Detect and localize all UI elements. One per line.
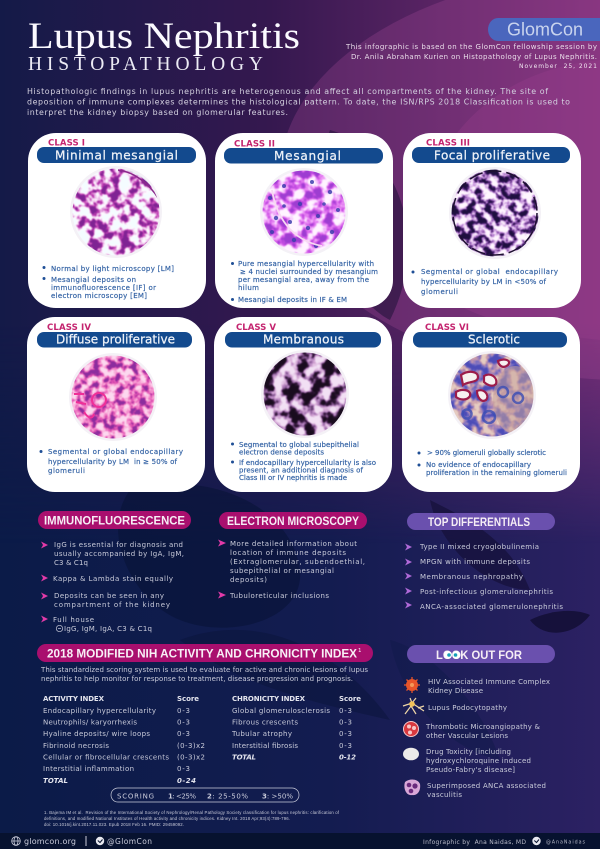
bullets: glomeruli [421, 288, 458, 296]
text block: ANCA-associated glomerulonephritis [420, 603, 563, 611]
class title pill: Minimal mesangial [55, 148, 178, 162]
arrow [405, 588, 412, 594]
bullets: hypercellularity by LM in ≥ 50% of [48, 458, 178, 466]
arrow [218, 540, 226, 546]
bullets: Segmental to global subepithelial [239, 441, 359, 449]
micrograph [448, 351, 537, 439]
scoring legend: 3: >50% [262, 792, 293, 800]
arrow [405, 602, 412, 608]
class label: CLASS IV [47, 323, 91, 333]
session credit: Dr. Anila Abraham Kurien on Histopathology of Lupus Nephritis. [351, 53, 597, 61]
session credit [345, 43, 597, 70]
class label: CLASS III [426, 138, 470, 148]
text block [54, 592, 170, 609]
bullets: per mesangial area, away from the [238, 276, 369, 284]
handle: @GlomCon [107, 837, 152, 846]
text block: deposits) [230, 576, 267, 584]
class label: CLASS VI [425, 323, 469, 333]
micrograph [260, 168, 348, 256]
intro text: Histopathologic findings in lupus nephritis are heterogenous and affect all compartments of the kidney. The site of [27, 87, 548, 96]
panel: class VI [402, 317, 580, 492]
arrow [405, 558, 412, 566]
author handle: @AnaNaidas [546, 840, 586, 846]
arrow [405, 572, 412, 580]
heading: LOOK OUT FOR [436, 650, 523, 662]
heading [219, 512, 367, 529]
heading [38, 511, 191, 529]
text block: HIV Associated Immune Complex [428, 678, 550, 686]
panel: top differentials [405, 513, 563, 611]
heading: ELECTRON MICROSCOPY [227, 516, 359, 528]
micrograph [449, 167, 541, 259]
micrograph [261, 350, 349, 438]
bullets: proliferation in the remaining glomeruli [426, 469, 567, 477]
text block [426, 748, 531, 774]
bullets: hilum [238, 284, 259, 292]
bullets: Segmental or global endocapillary [421, 268, 558, 276]
icon: neutrophil [404, 780, 420, 795]
footnote: definitions, and modified National Institutes of Health activity and chronicity indices. Kidney Int. 2018 Apr;93(4):789-796. [44, 816, 290, 821]
text block: Deposits can be seen in any [54, 592, 164, 600]
icon: twitter [532, 837, 541, 845]
activity index table: 0-3 [177, 765, 190, 773]
class label: CLASS V [236, 323, 276, 333]
class title pill [224, 148, 383, 164]
text block [425, 723, 541, 740]
GlomCon badge [488, 18, 600, 41]
session credit: November 25, 2021 [519, 63, 597, 70]
class title pill: Membranous [263, 332, 344, 346]
activity index table: TOTAL [43, 777, 68, 785]
arrow [41, 616, 48, 622]
intro text: interpret the kidney biopsy based on glomerular features. [27, 108, 288, 117]
bullets [40, 448, 183, 475]
class title pill [37, 332, 192, 348]
chronicity index table: Tubular atrophy [231, 730, 292, 738]
intro text: deposition of immune complexes determines the histological pattern. To date, the ISN/RPS 2018 Classification is used to [27, 98, 570, 106]
bullets: electron microscopy [EM] [51, 292, 147, 300]
chronicity index table: 0-3 [339, 730, 352, 738]
activity index table: Score [177, 695, 199, 703]
bullets: present, an additional diagnosis of [239, 466, 364, 474]
panel: electron microscopy [218, 512, 367, 600]
heading [407, 513, 555, 530]
bullets: No evidence of endocapillary [426, 461, 531, 469]
text block: compartment of the kidney [54, 601, 170, 609]
bullets: Mesangial deposits in IF & EM [238, 296, 347, 304]
bullets: If endocapillary hypercellularity is also [239, 459, 376, 467]
text block: Tubuloreticular inclusions [229, 592, 329, 600]
activity index table: 0-3 [177, 707, 190, 715]
chronicity index table: Global glomerulosclerosis [232, 707, 330, 715]
icon: pill [403, 748, 419, 760]
activity index table: 0-3 [177, 718, 190, 726]
class title pill: Sclerotic [468, 332, 520, 346]
heading: 1 [358, 648, 362, 654]
text block [53, 616, 152, 633]
chronicity index table: Interstitial fibrosis [232, 742, 298, 750]
heading: IMMUNOFLUORESCENCE [44, 516, 185, 528]
arrow [218, 592, 226, 598]
text block: Thrombotic Microangiopathy & [425, 723, 541, 731]
icon: twitter [96, 837, 104, 845]
description [40, 666, 368, 683]
website: glomcon.org [24, 837, 76, 846]
class title pill: Focal proliferative [434, 148, 550, 162]
bullets: Normal by light microscopy [LM] [51, 265, 174, 273]
micrograph [69, 353, 157, 441]
chronicity index table: TOTAL [232, 754, 256, 762]
activity index table: (0-3)x2 [177, 742, 205, 750]
text block: Superimposed ANCA associated [427, 782, 546, 790]
activity index table: (0-3)x2 [177, 754, 205, 762]
arrow [405, 544, 412, 550]
text block: (Extraglomerular, subendoethial, [230, 558, 365, 566]
class title pill: Diffuse proliferative [56, 332, 175, 346]
title: Lupus Nephritis [28, 16, 300, 57]
bullets: electron dense deposits [239, 448, 324, 456]
class title pill [413, 332, 567, 348]
bullets [412, 268, 558, 296]
text block: IgG is essential for diagnosis and [54, 541, 183, 549]
footnote [44, 810, 340, 827]
bullets: immunofluorescence [IF] or [51, 284, 156, 292]
text block: subepithelial or mesangial [230, 567, 334, 575]
text block: IgG, IgM, IgA, C3 & C1q [64, 625, 152, 633]
panel: class IV [27, 317, 205, 492]
text block: location of immune deposits [230, 549, 346, 557]
text block: Type II mixed cryoglobulinemia [419, 543, 539, 551]
text block [54, 541, 184, 567]
chronicity index table: 0-3 [339, 742, 352, 750]
arrow [41, 592, 48, 600]
class label: CLASS II [234, 140, 275, 150]
chronicity index table: 0-3 [339, 707, 352, 715]
panel: immunofluorescence [38, 511, 191, 633]
activity index table: Interstitial inflammation [43, 765, 134, 773]
activity index table: Endocapillary hypercellularity [43, 707, 156, 715]
title [28, 16, 300, 75]
bullets [231, 260, 378, 304]
text block: other Vascular Lesions [426, 732, 508, 740]
chronicity index table: 0-3 [339, 718, 352, 726]
text block [230, 540, 365, 584]
class title pill [412, 147, 570, 163]
intro text [27, 87, 570, 117]
class title pill: Mesangial [274, 149, 341, 163]
chronicity index table: 0-12 [339, 754, 356, 762]
text block: MPGN with immune deposits [420, 558, 530, 566]
bullets: > 90% glomeruli globally sclerotic [427, 449, 546, 457]
footer [0, 833, 600, 849]
description: This standardized scoring system is used to evaluate for active and chronic lesions of lupus [40, 666, 368, 674]
micrograph [70, 166, 162, 258]
activity index table [43, 695, 205, 785]
activity index table: ACTIVITY INDEX [43, 695, 105, 703]
arrow [41, 542, 48, 548]
text block: C3 & C1q [54, 559, 88, 567]
footnote: doi: 10.1016/j.kint.2017.11.023. Epub 2018 Feb 16. PMID: 29459092. [44, 822, 184, 827]
description: nephritis to help monitor for response to treatment, disease progression and prognosis. [41, 675, 353, 683]
bullets: Mesangial deposits on [51, 276, 136, 284]
text block: Membranous nephropathy [420, 573, 523, 581]
text block [428, 678, 550, 695]
panel: class V [214, 317, 392, 492]
chronicity index table [231, 695, 361, 762]
heading: TOP DIFFERENTIALS [428, 517, 530, 529]
scoring legend: 2: 25-50% [207, 792, 248, 800]
author credit: Infographic by Ana Naidas, MD [423, 839, 526, 846]
icon: podocyte [403, 698, 424, 714]
chronicity index table: Fibrous crescents [232, 718, 298, 726]
bullets [42, 265, 174, 300]
bullets: hypercellularity by LM in <50% of [421, 278, 547, 286]
text block [427, 782, 546, 799]
heading [407, 645, 555, 663]
text block: Full house [53, 616, 94, 624]
text block: hydroxychloroquine induced [426, 757, 531, 765]
bullets [418, 449, 567, 477]
activity index table: Neutrophils/ karyorrhexis [43, 718, 137, 726]
activity index table: Fibrinoid necrosis [43, 742, 109, 750]
text block: Drug Toxicity [including [426, 748, 511, 756]
GlomCon badge: GlomCon [507, 20, 583, 40]
text block: Pseudo-Fabry's disease] [426, 766, 515, 774]
scoring legend [111, 788, 299, 802]
text block: usually accompanied by IgA, IgM, [54, 550, 184, 558]
scoring legend: 1: <25% [168, 792, 196, 800]
activity index table: 0-24 [177, 777, 196, 785]
heading: 2018 MODIFIED NIH ACTIVITY AND CHRONICITY INDEX [47, 646, 357, 660]
chronicity index table: CHRONICITY INDEX [232, 695, 306, 703]
text block: Lupus Podocytopathy [428, 704, 507, 712]
arrow [41, 574, 48, 582]
text block: Kidney Disease [428, 687, 483, 695]
panel: NIH index [37, 644, 373, 827]
icon: globe [12, 837, 20, 845]
icon: virus [404, 677, 420, 693]
text block: Kappa & Lambda stain equally [53, 575, 173, 583]
text block: More detailed information about [230, 540, 357, 548]
title: HISTOPATHOLOGY [28, 54, 263, 75]
bullets: Segmental or global endocapillary [48, 448, 183, 456]
bullets [231, 441, 376, 482]
panel: look out for [403, 645, 555, 799]
scoring legend: SCORING [117, 792, 154, 800]
session credit: This infographic is based on the GlomCon fellowship session by [345, 43, 597, 51]
panel: class I [28, 133, 206, 308]
panel: class II [215, 133, 393, 308]
bullets: Pure mesangial hypercellularity with [238, 260, 374, 268]
activity index table: Cellular or fibrocellular crescents [43, 754, 169, 762]
activity index table: 0-3 [177, 730, 190, 738]
bullets: glomeruli [48, 467, 85, 475]
bullets: Class III or IV nephritis is made [239, 474, 347, 482]
class label: CLASS I [48, 138, 85, 148]
text block: vasculitis [427, 791, 462, 799]
class title pill [225, 332, 381, 348]
class title pill [37, 147, 196, 163]
bullets: ≥ 4 nuclei surrounded by mesangium [240, 268, 378, 276]
chronicity index table: Score [339, 695, 361, 703]
icon: vascular lesion [404, 722, 418, 736]
panel: class III [403, 133, 581, 308]
activity index table: Hyaline deposits/ wire loops [43, 730, 150, 738]
footnote: 1. Bajema IM et al. Revision of the International Society of Nephrology/Renal Pathology Society classification for lupus nephritis: clarification of [44, 810, 340, 815]
text block: Post-infectious glomerulonephritis [420, 588, 553, 596]
